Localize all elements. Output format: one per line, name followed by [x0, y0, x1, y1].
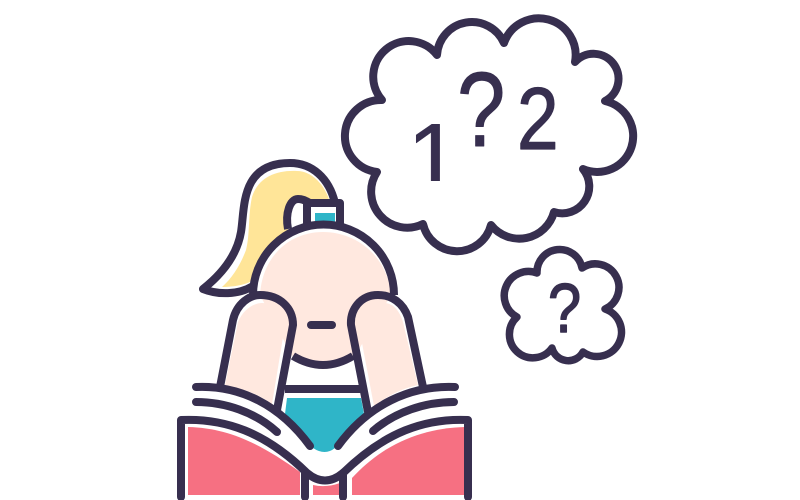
number two: 2: [517, 70, 559, 168]
hair tie: [287, 199, 340, 229]
book cover right: [352, 427, 465, 495]
book outline: [181, 420, 468, 497]
illustration: confused girl reading a book: [177, 14, 638, 500]
left arm: [220, 295, 293, 410]
number one: 1: [407, 104, 460, 211]
small bubble outline: [504, 249, 621, 361]
right arm: [351, 295, 423, 412]
shirt: [285, 389, 364, 452]
head: [253, 225, 394, 365]
book spine: [305, 473, 343, 497]
large thought bubble: [345, 18, 633, 251]
ponytail hair: [203, 163, 335, 293]
second page lines: [196, 402, 454, 432]
small thought bubble: [504, 249, 621, 361]
girl: [203, 163, 423, 452]
large bubble outline: [345, 18, 633, 251]
book cover middle: [313, 483, 340, 495]
open book: [181, 387, 468, 497]
book cover left: [188, 427, 300, 495]
mouth: [311, 321, 332, 329]
small question mark: ?: [548, 268, 581, 347]
top page lines: [196, 387, 455, 446]
question mark: ?: [457, 50, 505, 169]
